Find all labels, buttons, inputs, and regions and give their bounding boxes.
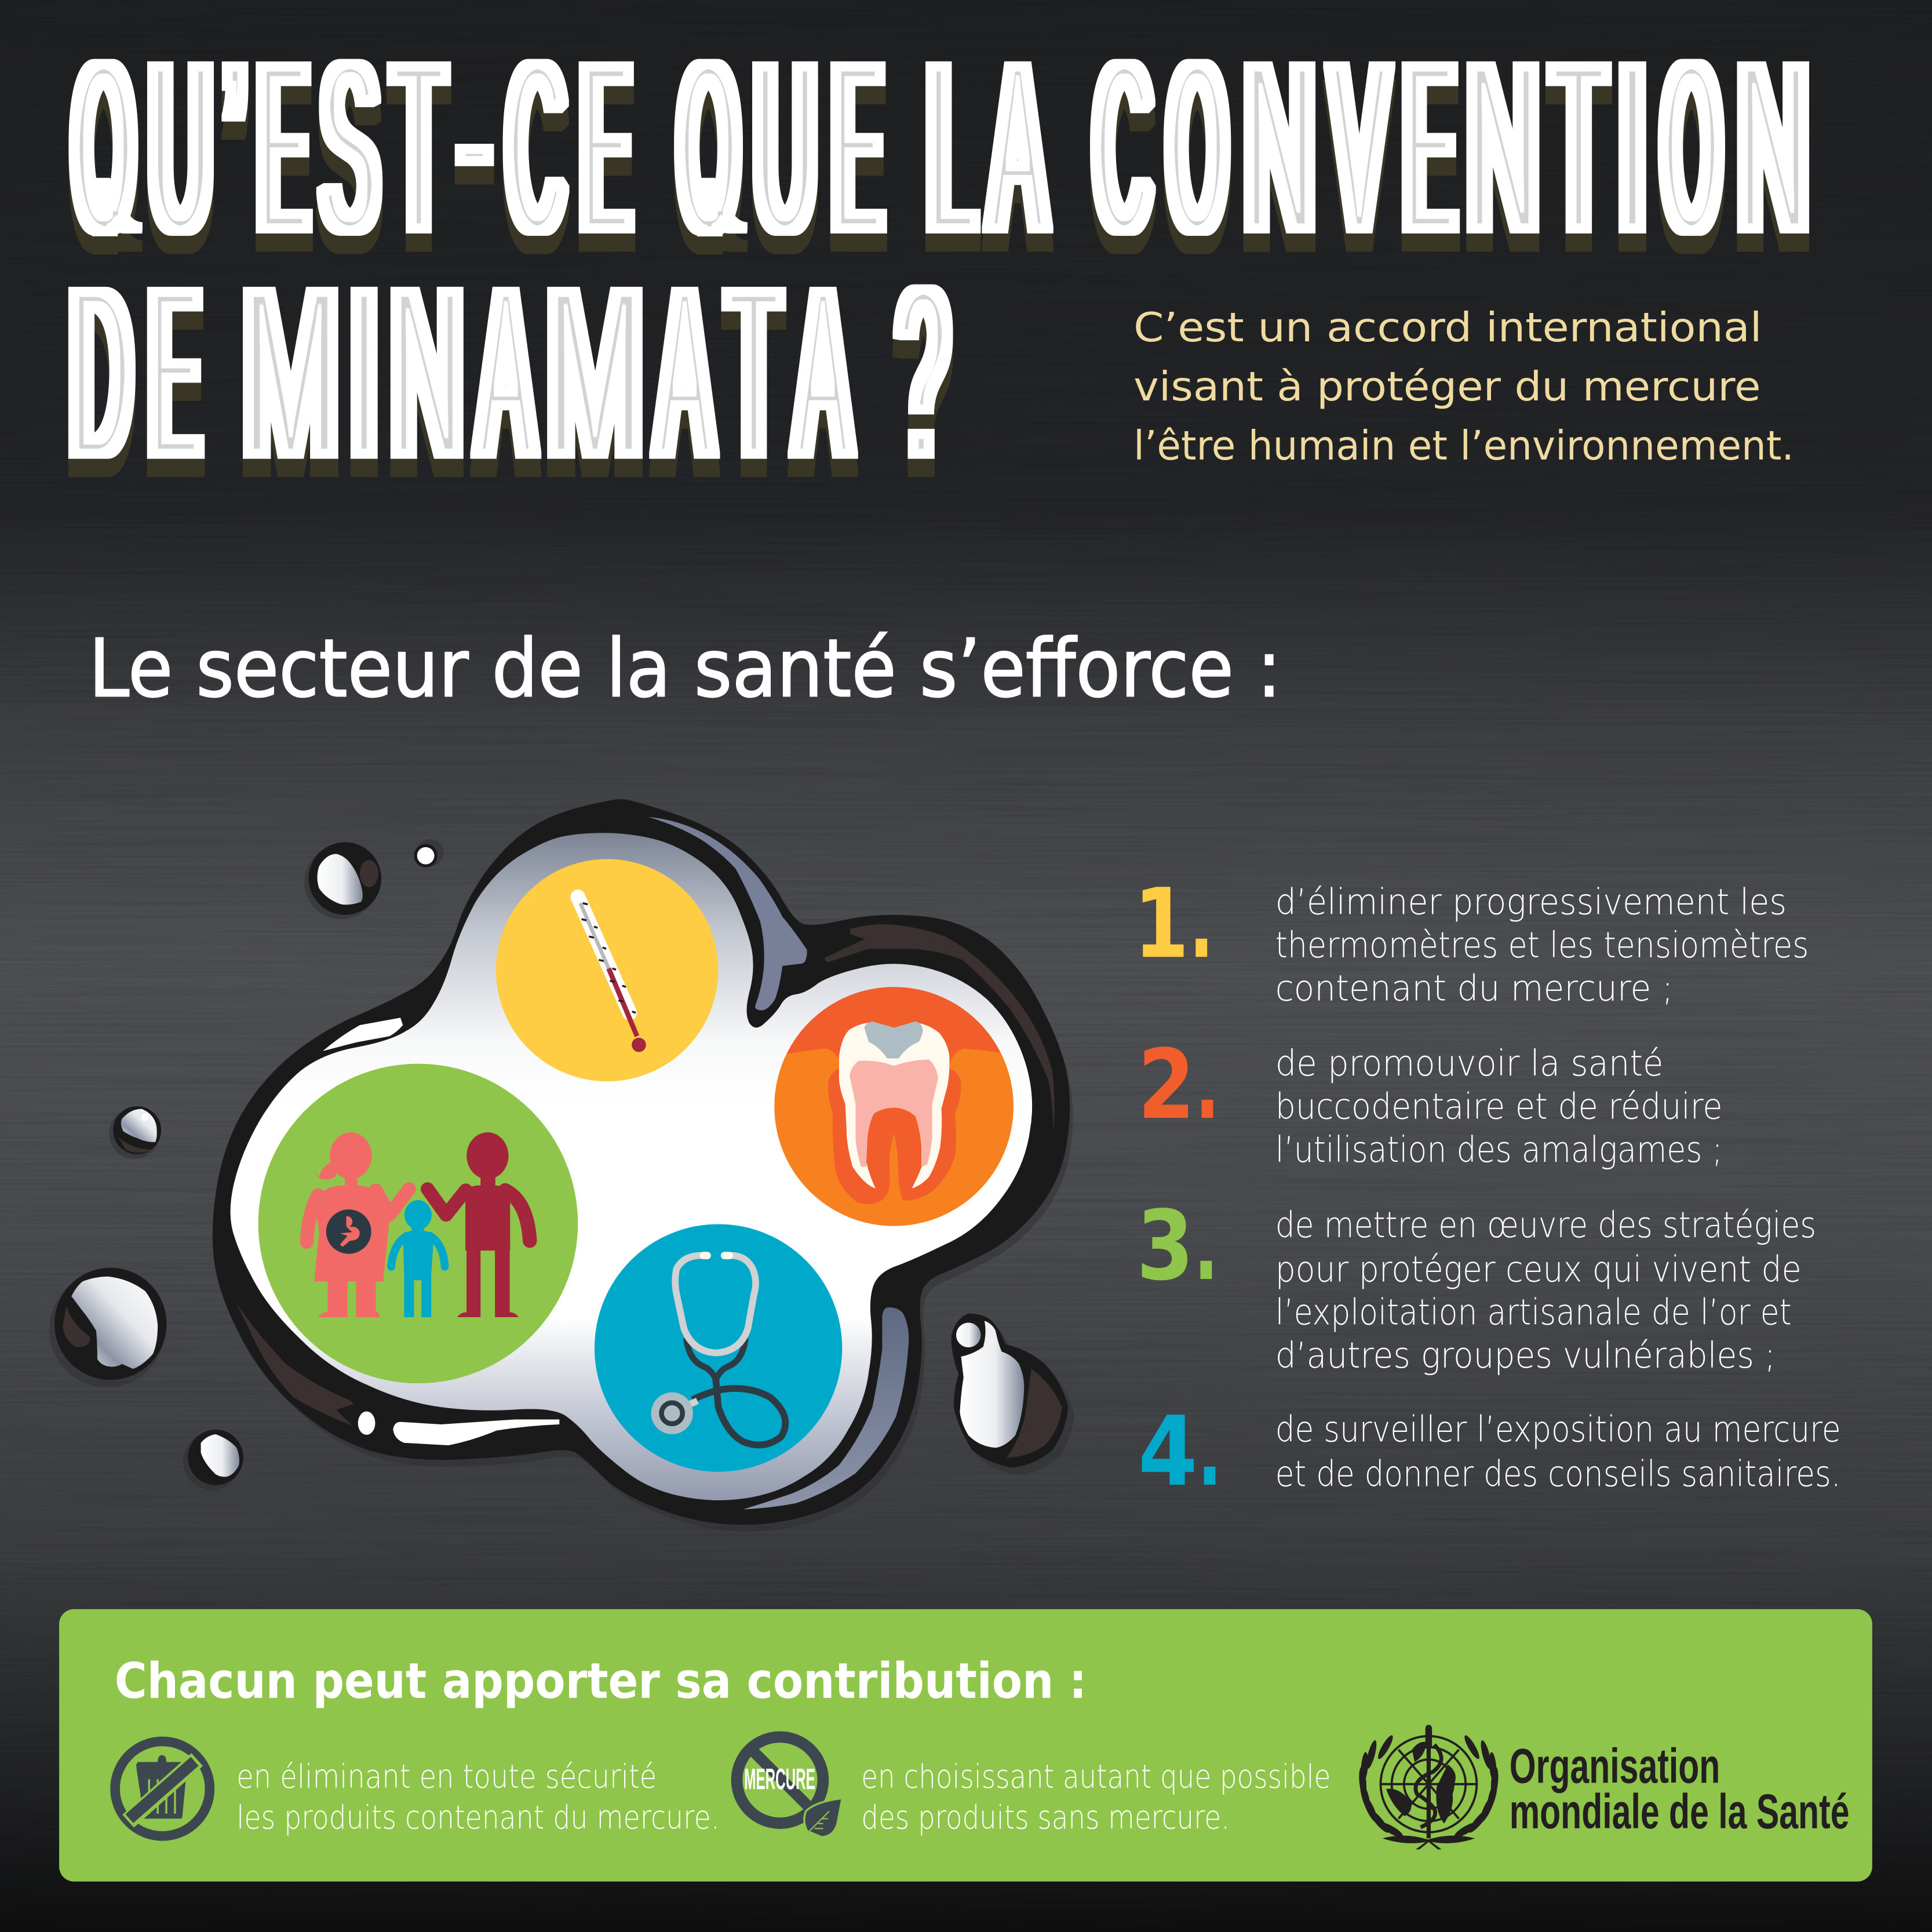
list item 4: 4 — [1138, 1396, 1198, 1508]
title: QU'EST-CE QUE LA CONVENTION DE MINAMATA ?: M — [547, 238, 643, 508]
laurel right — [1453, 1734, 1499, 1840]
title: QU'EST-CE QUE LA CONVENTION DE MINAMATA ?: A — [797, 238, 850, 507]
icon: stethoscope in blue circle — [595, 1224, 842, 1472]
droplet 4 — [49, 1268, 166, 1387]
list item 3: 3 — [1136, 1190, 1194, 1302]
mercury blob illustration — [214, 801, 1073, 1532]
list item 1 — [1133, 868, 1809, 1009]
title: QU'EST-CE QUE LA CONVENTION DE MINAMATA ?: E — [834, 12, 881, 282]
title: QU'EST-CE QUE LA CONVENTION DE MINAMATA ?: E — [582, 12, 629, 282]
list item 1: . — [1189, 868, 1214, 980]
list item 1: 1 — [1133, 868, 1189, 979]
text: eliminate safely: en éliminant en toute sécurité — [236, 1758, 657, 1796]
icon: tooth in orange circle — [764, 987, 1023, 1232]
title: QU'EST-CE QUE LA CONVENTION DE MINAMATA ?: C — [508, 13, 563, 282]
slate reflection bottom right — [743, 1307, 909, 1510]
white highlights on rim — [323, 1018, 559, 1445]
list item 2: buccodentaire et de réduire — [1275, 1086, 1723, 1128]
intro text: visant à protéger du mercure — [1133, 364, 1760, 410]
icon: no trash — [115, 1741, 210, 1836]
title: QU'EST-CE QUE LA CONVENTION DE MINAMATA ?: E — [259, 13, 307, 282]
list item 1: thermomètres et les tensiomètres — [1275, 924, 1809, 966]
list item 4 — [1138, 1396, 1841, 1508]
title: QU'EST-CE QUE LA CONVENTION DE MINAMATA ?: ’ — [225, 13, 245, 282]
list item 3 — [1136, 1190, 1816, 1376]
section heading: Le secteur de la santé s’efforce : — [89, 622, 1281, 715]
title: QU'EST-CE QUE LA CONVENTION DE MINAMATA ?: A — [479, 238, 533, 507]
list item 3: d’autres groupes vulnérables ; — [1275, 1335, 1776, 1376]
droplet 3 — [109, 1106, 161, 1159]
text: choose mercury-free: des produits sans mercure. — [861, 1799, 1230, 1836]
list item 3: pour protéger ceux qui vivent de — [1275, 1248, 1802, 1290]
panel: green contribution banner — [59, 1609, 1872, 1882]
title: QU'EST-CE QUE LA CONVENTION DE MINAMATA ?: I — [351, 238, 377, 507]
text: eliminate safely — [236, 1758, 720, 1836]
title: QU'EST-CE QUE LA CONVENTION DE MINAMATA ?: T — [1553, 13, 1605, 282]
title: QU'EST-CE QUE LA CONVENTION DE MINAMATA ?: T — [394, 12, 444, 282]
list item 4: . — [1197, 1396, 1222, 1508]
text: eliminate safely: les produits contenant du mercure. — [236, 1799, 720, 1836]
list item 3: de mettre en œuvre des stratégies — [1275, 1204, 1816, 1246]
mother — [307, 1132, 409, 1317]
list item 2: . — [1195, 1029, 1220, 1141]
blob outline — [214, 801, 1068, 1523]
title: QU'EST-CE QUE LA CONVENTION DE MINAMATA ?: N — [1245, 13, 1314, 282]
list item 2: l’utilisation des amalgames ; — [1275, 1129, 1723, 1171]
droplet 5 — [183, 1430, 243, 1490]
title: QU'EST-CE QUE LA CONVENTION DE MINAMATA ?: - — [460, 25, 489, 253]
title: QU'EST-CE QUE LA CONVENTION DE MINAMATA ?: T — [728, 238, 779, 507]
list item 3: . — [1194, 1190, 1219, 1302]
banner heading: Chacun peut apporter sa contribution : — [115, 1653, 1087, 1710]
title: QU'EST-CE QUE LA CONVENTION DE MINAMATA ?: A — [991, 13, 1045, 282]
title: QU'EST-CE QUE LA CONVENTION DE MINAMATA ?: E — [1405, 13, 1454, 282]
list item 2: de promouvoir la santé — [1275, 1042, 1663, 1084]
list item 2: 2 — [1138, 1029, 1195, 1141]
droplet 2 — [414, 839, 443, 867]
logo: WHO emblem — [1358, 1725, 1499, 1850]
list item 1: d’éliminer progressivement les — [1275, 881, 1787, 923]
text: choose mercury-free — [861, 1758, 1330, 1836]
title: QU'EST-CE QUE LA CONVENTION DE MINAMATA ?: ? — [898, 238, 947, 507]
list item 4: et de donner des conseils sanitaires. — [1275, 1453, 1841, 1494]
title: QU'EST-CE QUE LA CONVENTION DE MINAMATA ?: S — [322, 13, 377, 282]
title: QU'EST-CE QUE LA CONVENTION DE MINAMATA ? — [68, 59, 1809, 477]
title: QU'EST-CE QUE LA CONVENTION DE MINAMATA ?: U — [755, 12, 815, 282]
icon: no mercury with leaf — [737, 1737, 842, 1837]
intro text: l’être humain et l’environnement. — [1133, 423, 1794, 469]
title: QU'EST-CE QUE LA CONVENTION DE MINAMATA ?: O — [1664, 12, 1719, 281]
droplet 6: right — [951, 1314, 1074, 1475]
title: QU'EST-CE QUE LA CONVENTION DE MINAMATA ?: L — [928, 12, 974, 282]
fetus in belly — [326, 1209, 371, 1254]
list item 1: contenant du mercure ; — [1275, 968, 1673, 1009]
blob shadow — [219, 810, 1073, 1532]
title: QU'EST-CE QUE LA CONVENTION DE MINAMATA ?: N — [392, 238, 462, 507]
icon: family in green circle — [258, 1064, 578, 1383]
title: QU'EST-CE QUE LA CONVENTION DE MINAMATA ?: N — [1468, 13, 1538, 282]
father — [428, 1132, 530, 1317]
title: QU'EST-CE QUE LA CONVENTION DE MINAMATA ?: O — [1169, 12, 1225, 281]
droplet 1 — [304, 842, 381, 919]
title: QU'EST-CE QUE LA CONVENTION DE MINAMATA ?: N — [1738, 13, 1808, 282]
text: choose mercury-free: en choisissant autant que possible — [861, 1758, 1330, 1796]
icon: thermometer in yellow circle — [496, 859, 718, 1081]
white mercury body — [231, 833, 1032, 1500]
title: QU'EST-CE QUE LA CONVENTION DE MINAMATA ?: V — [1332, 12, 1387, 282]
logo text: Organisation — [1510, 1738, 1720, 1793]
title: QU'EST-CE QUE LA CONVENTION DE MINAMATA ?: Q — [74, 13, 133, 282]
brown reflection top right — [825, 924, 1055, 1133]
logo text — [1510, 1738, 1850, 1839]
laurel left — [1358, 1734, 1405, 1840]
brown reflection bottom left — [236, 1304, 353, 1426]
title: QU'EST-CE QUE LA CONVENTION DE MINAMATA ?: M — [243, 238, 338, 508]
child — [391, 1200, 445, 1317]
intro text: C’est un accord international — [1133, 305, 1762, 351]
list item 2 — [1138, 1029, 1723, 1171]
intro text — [1133, 305, 1794, 469]
list item 4: de surveiller l’exposition au mercure — [1275, 1409, 1841, 1450]
icon: no mercury with leaf: MERCURE — [744, 1762, 815, 1795]
title: QU'EST-CE QUE LA CONVENTION DE MINAMATA ?: D — [71, 238, 130, 507]
title: QU'EST-CE QUE LA CONVENTION DE MINAMATA ?: U — [150, 13, 211, 282]
title: QU'EST-CE QUE LA CONVENTION DE MINAMATA ?: Q — [680, 13, 737, 282]
title: QU'EST-CE QUE LA CONVENTION DE MINAMATA ?: E — [150, 238, 199, 508]
slate reflection top right — [648, 817, 807, 1011]
title: QU'EST-CE QUE LA CONVENTION DE MINAMATA ?: C — [1095, 13, 1150, 282]
title: QU'EST-CE QUE LA CONVENTION DE MINAMATA ?: I — [1618, 13, 1646, 282]
list item 3: l’exploitation artisanale de l’or et — [1275, 1292, 1792, 1333]
title: QU'EST-CE QUE LA CONVENTION DE MINAMATA ?: A — [658, 238, 712, 507]
